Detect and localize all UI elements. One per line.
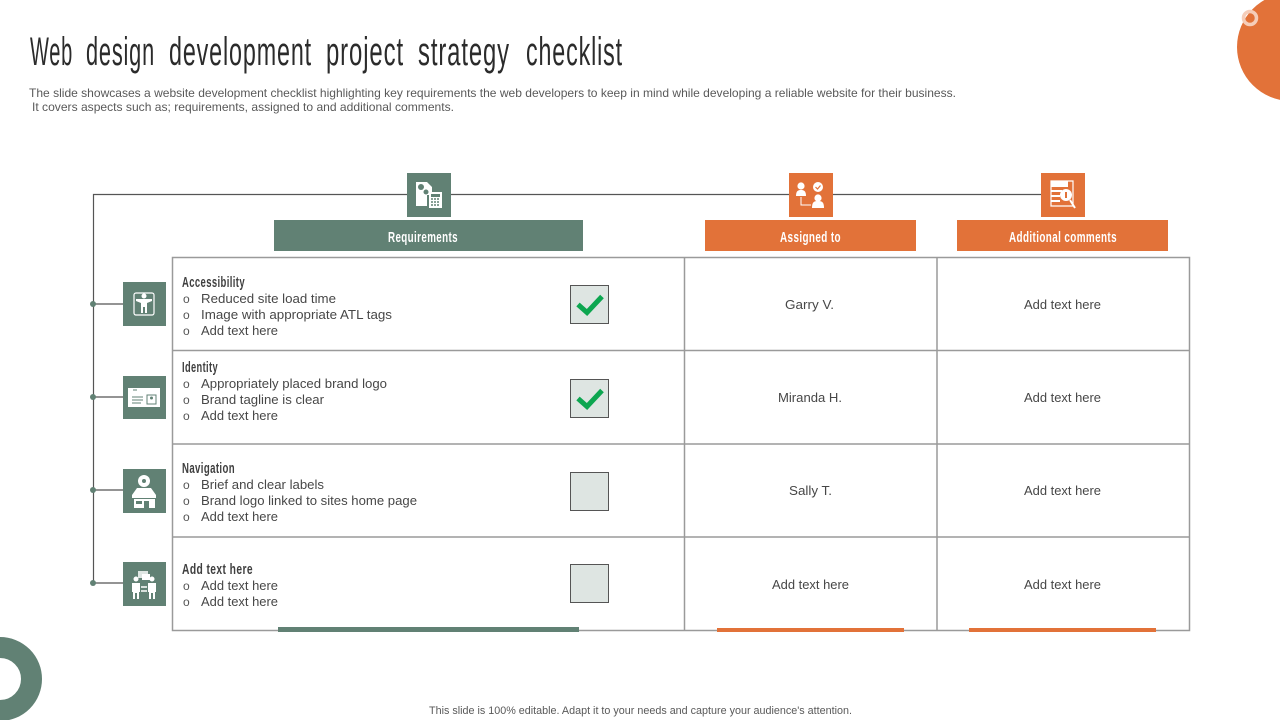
row: Add text here: Add text here [1024, 577, 1101, 592]
row: Accessibility: o [183, 308, 190, 322]
decoration: orange circle top right [1237, 0, 1280, 101]
decoration: green ring bottom left [0, 648, 32, 710]
icon: browser profile window [123, 376, 166, 419]
title: Web [30, 30, 73, 74]
checkbox: checked [570, 380, 608, 418]
row: Identity: o [183, 409, 190, 423]
checkbox: empty [570, 472, 608, 510]
header: Requirements [274, 220, 583, 251]
row: Accessibility: Add text here [1024, 297, 1101, 312]
row: Add text here: Add text here [201, 578, 278, 593]
row: Add text here: o [183, 579, 190, 593]
row: Navigation: o [183, 478, 190, 492]
title: design [86, 30, 155, 74]
icon: store with location pin [123, 469, 166, 513]
description: The slide showcases a website development checklist highlighting key requirements the web developers to keep in mind while developing a reliable website for their business. [29, 86, 956, 100]
checkbox: empty [570, 564, 608, 602]
icon: assigned people [789, 173, 833, 217]
title: strategy [418, 30, 510, 74]
row: Navigation: Brief and clear labels [201, 477, 324, 492]
row: Navigation [182, 460, 1101, 524]
row: Accessibility: o [183, 324, 190, 338]
row: Identity: Miranda H. [778, 390, 842, 405]
row: Identity: Add text here [201, 408, 278, 423]
row: Accessibility: Reduced site load time [201, 291, 336, 306]
row: Add text here: Add text here [772, 577, 849, 592]
row: Accessibility [182, 274, 1101, 338]
description: It covers aspects such as; requirements, assigned to and additional comments. [32, 100, 454, 114]
row: Identity [182, 359, 1101, 423]
icon: two people talking [123, 562, 166, 606]
header: Additional comments: Additional comments [1009, 229, 1117, 246]
row: Navigation: Add text here [1024, 483, 1101, 498]
row: Identity: Add text here [1024, 390, 1101, 405]
bottom accent bars [278, 627, 1156, 632]
row: Add text here: Add text here [201, 594, 278, 609]
row: Navigation: Brand logo linked to sites home page [201, 493, 417, 508]
row: Navigation: o [183, 510, 190, 524]
row: Identity: o [183, 377, 190, 391]
row: Navigation: Sally T. [789, 483, 832, 498]
row: Accessibility: Image with appropriate ATL tags [201, 307, 393, 322]
row: Accessibility: Accessibility [182, 274, 245, 291]
header: Assigned to: Assigned to [780, 229, 841, 246]
header: Assigned to [705, 220, 916, 251]
description [29, 86, 956, 114]
row: Accessibility: Add text here [201, 323, 278, 338]
footer note: This slide is 100% editable. Adapt it to your needs and capture your audience's attention. [429, 705, 852, 717]
title: development [169, 30, 312, 74]
row: Navigation: o [183, 494, 190, 508]
title: project [326, 30, 404, 74]
connector lines [90, 194, 1041, 586]
row: Identity: Identity [182, 359, 218, 376]
icon: comment document with magnifier [1041, 173, 1085, 217]
checklist table [172, 257, 1190, 631]
row: Identity: Appropriately placed brand logo [201, 376, 387, 391]
row: Accessibility: Garry V. [785, 297, 834, 312]
row: Accessibility: o [183, 292, 190, 306]
row: Add text here: o [183, 595, 190, 609]
icon: document and calculator [407, 173, 451, 217]
row: Navigation: Navigation [182, 460, 235, 477]
row: Identity: Brand tagline is clear [201, 392, 325, 407]
row: Add text here: Add text here [182, 561, 253, 578]
header: Additional comments [957, 220, 1168, 251]
row: Identity: o [183, 393, 190, 407]
title: checklist [526, 30, 623, 74]
checkbox: checked [570, 286, 608, 324]
icon: accessibility figure [123, 282, 166, 326]
row: Navigation: Add text here [201, 509, 278, 524]
row: Add text here [182, 561, 1101, 609]
header: Requirements: Requirements [388, 229, 458, 246]
